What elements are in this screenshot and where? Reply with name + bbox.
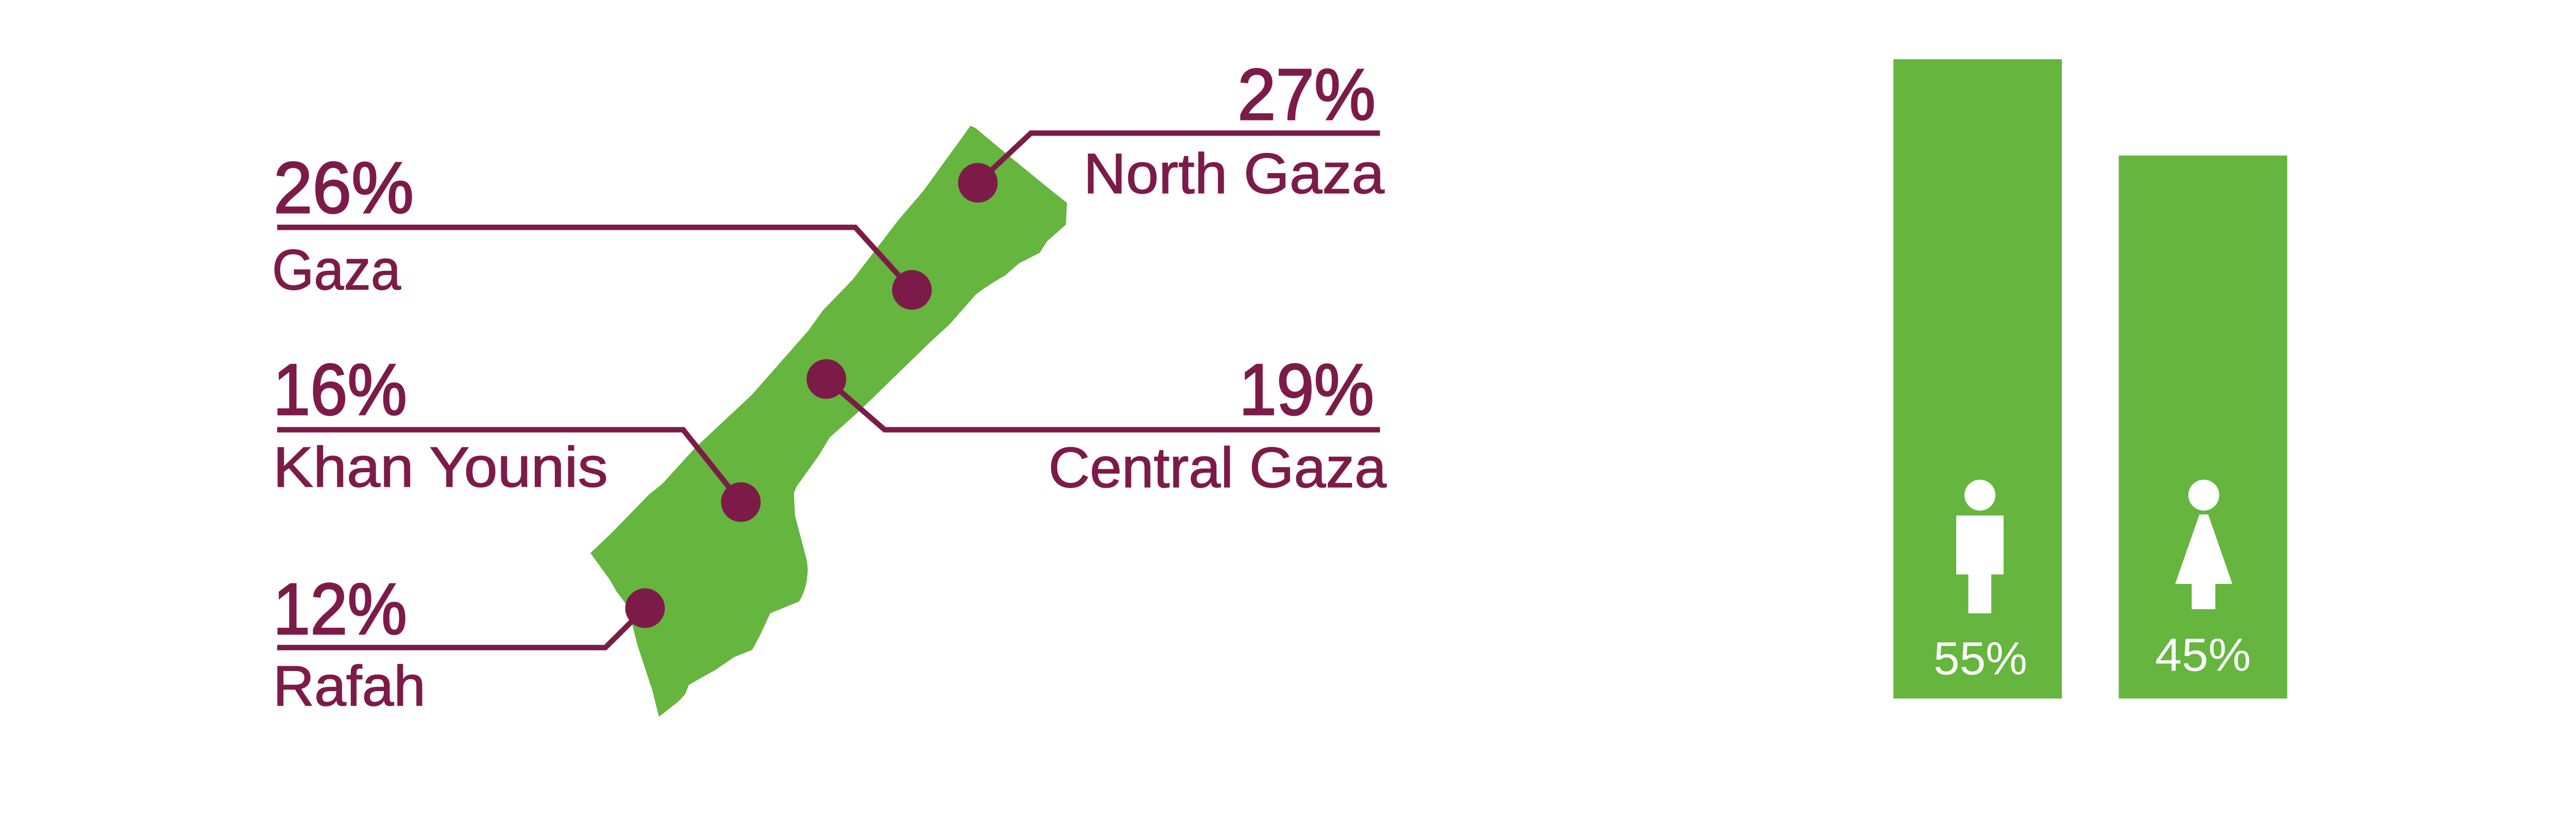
panel: gender bar chart: [1893, 59, 2287, 698]
leader line: North Gaza: [978, 133, 1380, 183]
value: 45%: 45%: [2155, 629, 2251, 681]
marker: North Gaza: [958, 163, 997, 203]
bar: female 45%: [2119, 156, 2287, 698]
value: Khan Younis 16%: 16%: [273, 349, 407, 430]
label: Rafah: Rafah: [273, 655, 426, 718]
marker: Gaza: [892, 270, 931, 310]
leader line: Rafah: [277, 608, 645, 648]
marker: Khan Younis: [721, 482, 760, 522]
panel: Gaza governorates map: [272, 54, 1387, 718]
leader line: Central Gaza: [826, 379, 1380, 429]
label: Central Gaza: Central Gaza: [1048, 436, 1387, 500]
leader line: Gaza: [277, 228, 912, 290]
bar column: female: [2119, 156, 2287, 698]
label: North Gaza: North Gaza: [1083, 142, 1385, 205]
icon: woman: [2175, 480, 2232, 609]
leader line: Khan Younis: [277, 429, 741, 502]
value: North Gaza 27%: 27%: [1238, 54, 1376, 135]
bar: male 55%: [1893, 59, 2062, 698]
bar column: male: [1893, 59, 2062, 698]
value: Gaza 26%: 26%: [274, 147, 414, 228]
label: Gaza: Gaza: [272, 238, 401, 302]
value: Rafah 12%: 12%: [273, 568, 407, 649]
icon: man: [1956, 480, 2004, 613]
value: Central Gaza 19%: 19%: [1239, 349, 1374, 430]
label: Khan Younis: Khan Younis: [273, 436, 608, 499]
marker: Rafah: [625, 588, 665, 628]
marker: Central Gaza: [807, 359, 846, 399]
value: 55%: 55%: [1934, 633, 2027, 685]
map: Gaza Strip shape: [590, 126, 1067, 717]
